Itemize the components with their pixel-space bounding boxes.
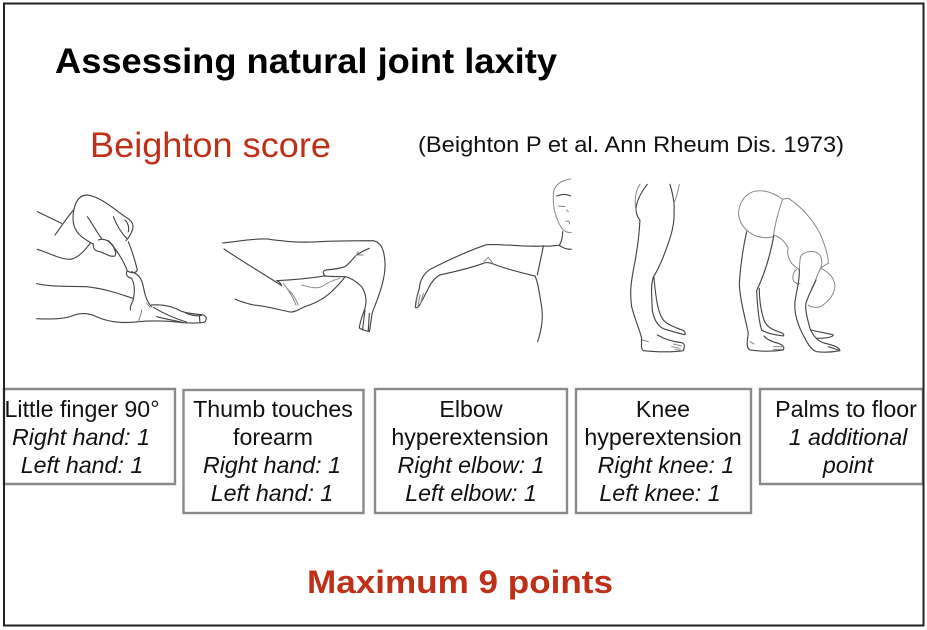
box: little finger: Left hand: 1 [21,452,143,478]
box: palms [760,389,923,484]
box: elbow [375,389,567,513]
box: little finger [4,389,175,484]
box: elbow: Left elbow: 1 [405,480,537,506]
heading: Beighton score: Beighton score [90,126,331,165]
box: palms: 1 additional [789,424,908,450]
box: thumb [184,390,364,513]
box: knee: Right knee: 1 [598,452,734,478]
illustration: knee hyperextension [631,184,685,352]
box: palms: Palms to floor [775,396,917,422]
illustration: thumb to forearm test [223,239,385,332]
box: palms: point [822,452,875,478]
illustration: palms to floor [739,191,840,352]
citation: (Beighton P et al. Ann Rheum Dis. 1973) [418,132,844,157]
box: little finger: Right hand: 1 [12,424,150,450]
box: knee: Knee [636,396,690,422]
box: little finger: Little finger 90° [5,396,159,422]
box: thumb: Thumb touches [193,396,353,422]
box: knee: hyperextension [584,424,742,450]
box: thumb: forearm [233,424,313,450]
box: elbow: hyperextension [391,424,549,450]
illustration: little finger test [37,195,206,323]
box: knee [576,389,751,513]
title: Assessing natural joint laxity [55,42,558,81]
box: elbow: Right elbow: 1 [398,452,544,478]
box: elbow: Elbow [439,396,503,422]
box: thumb: Right hand: 1 [203,452,341,478]
footer: maximum points: Maximum 9 points [307,564,613,600]
illustration: elbow hyperextension [415,179,571,342]
box: thumb: Left hand: 1 [211,480,333,506]
box: knee: Left knee: 1 [599,480,721,506]
